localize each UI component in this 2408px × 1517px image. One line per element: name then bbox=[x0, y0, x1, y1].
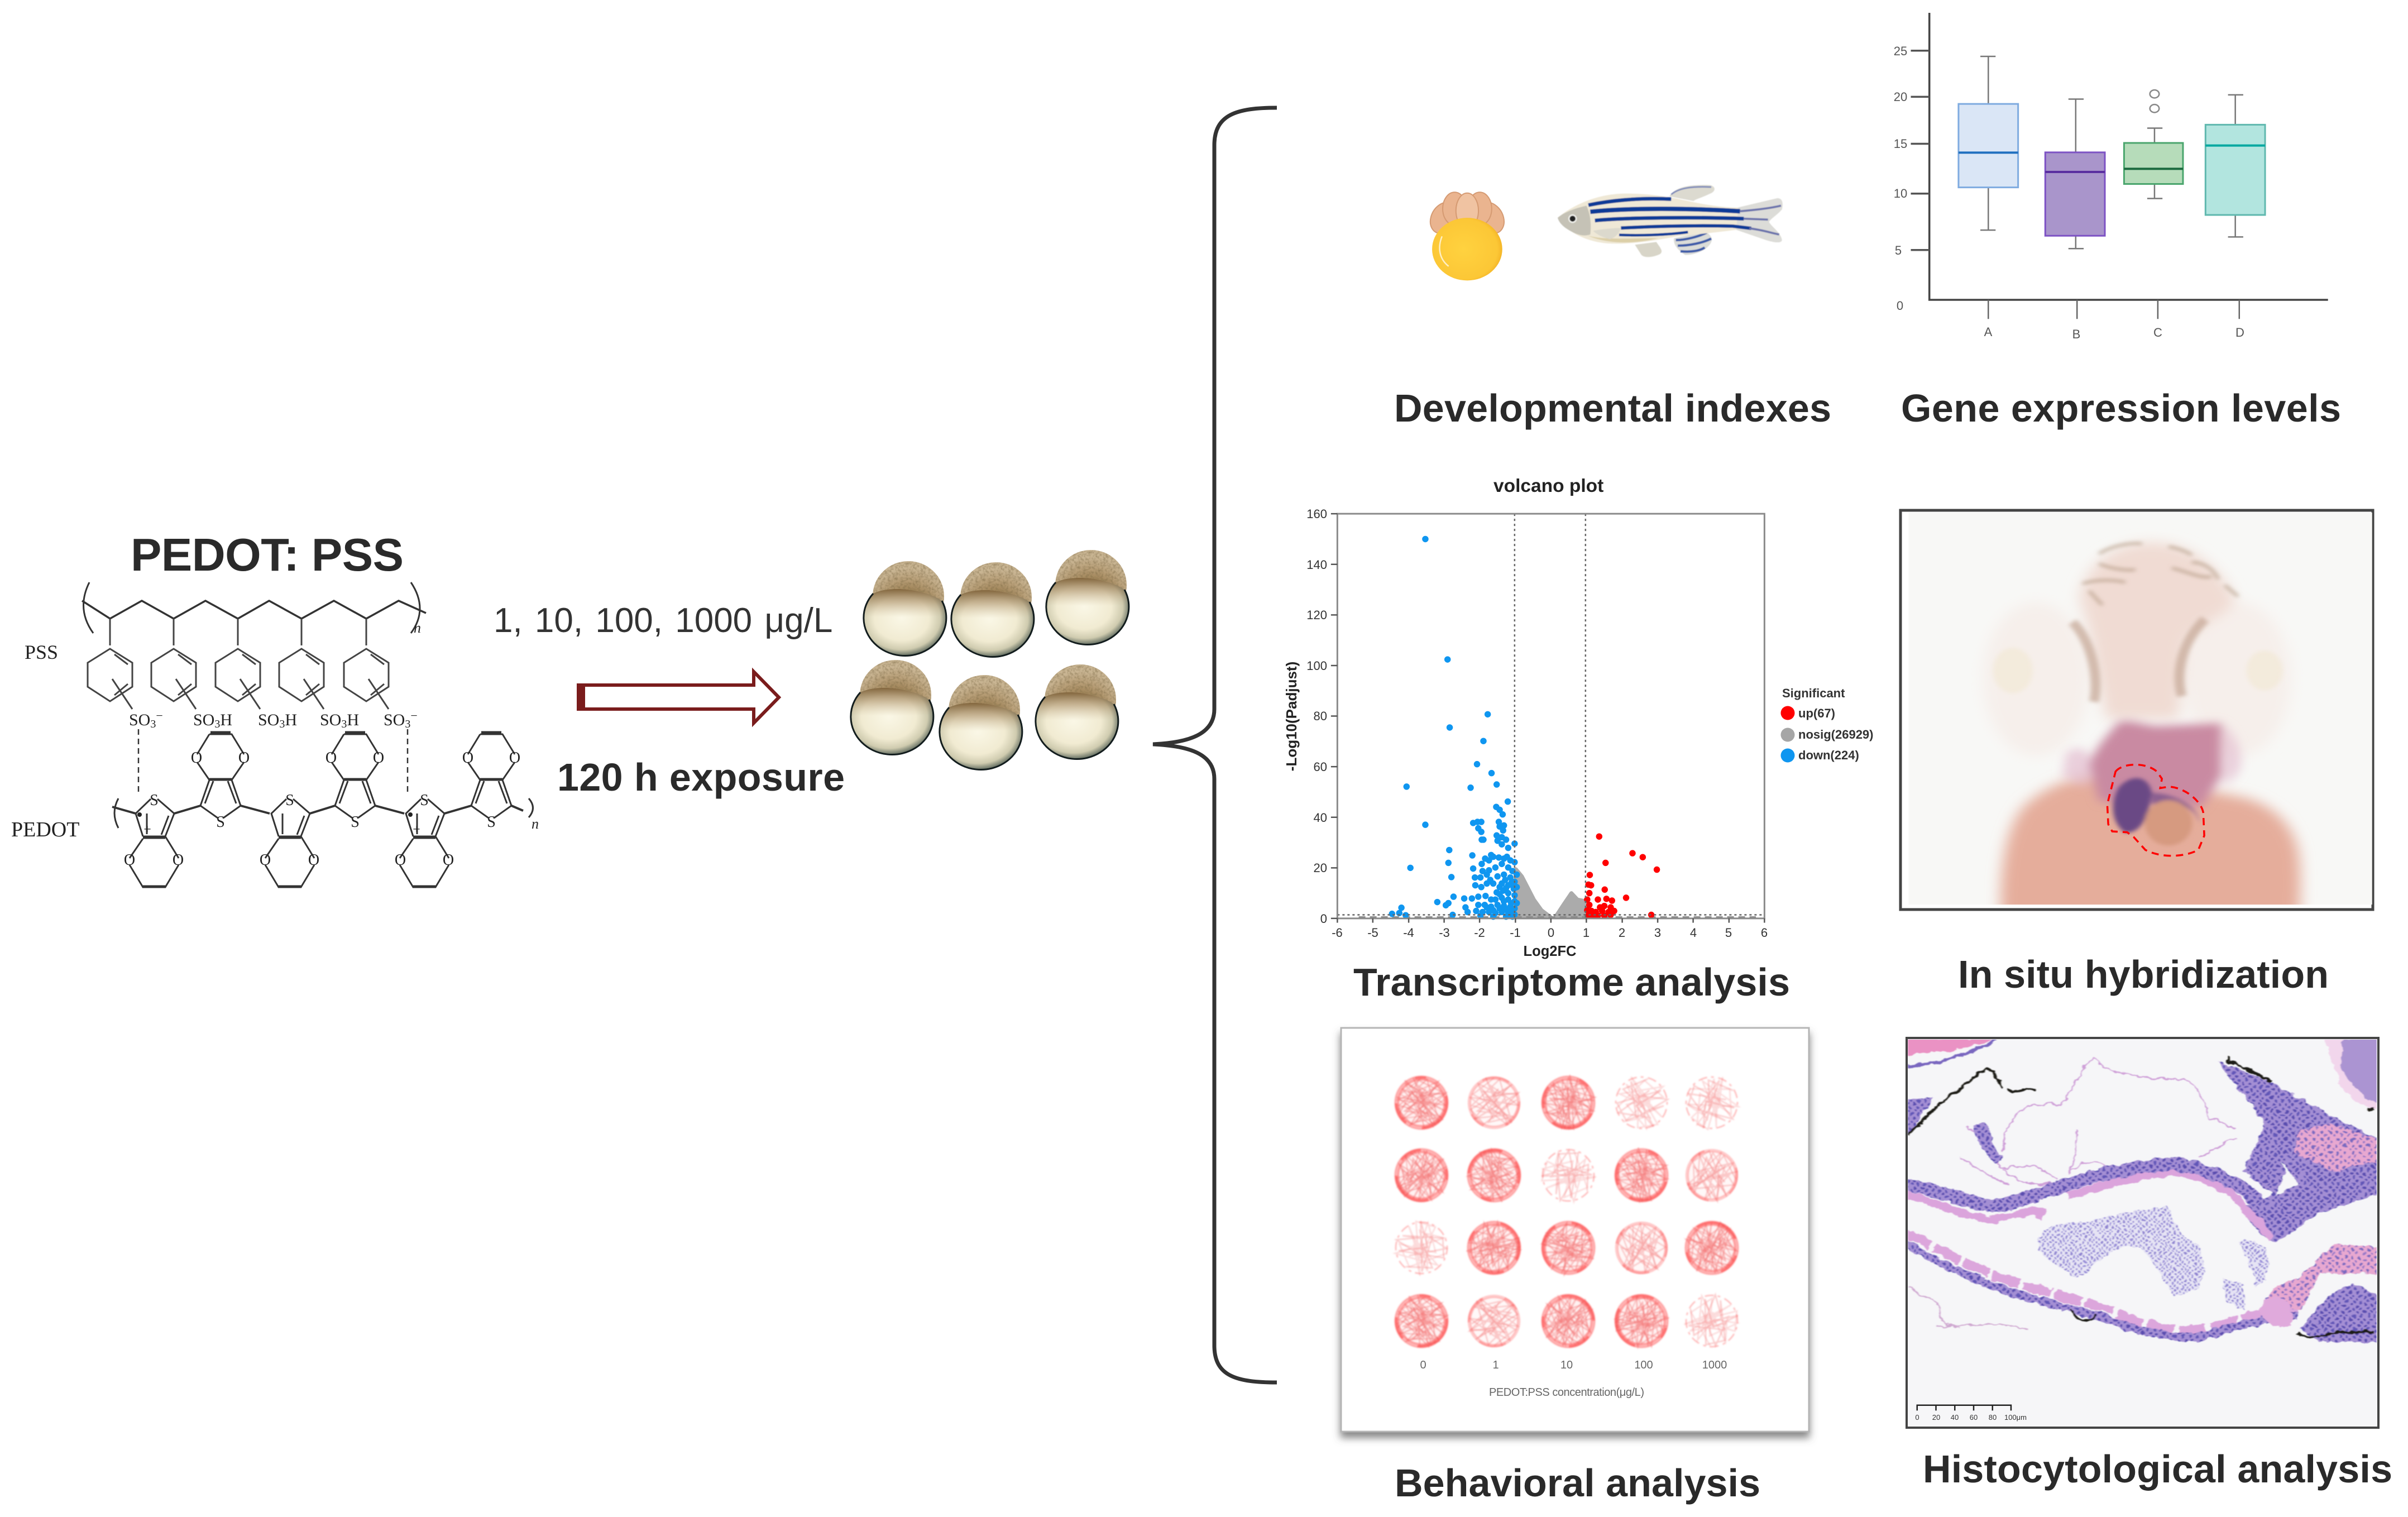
box C bbox=[2124, 90, 2183, 198]
non-significant points bbox=[1516, 869, 1586, 917]
chemical structure: PEDOT chain: O bbox=[395, 851, 406, 869]
x axis tick labels: 1 bbox=[1583, 926, 1590, 940]
sulfonate labels: H bbox=[347, 711, 359, 729]
axis labels: 25 bbox=[1894, 44, 1907, 58]
axis labels: 10 bbox=[1894, 186, 1907, 200]
scale bar labels: 20 bbox=[1932, 1413, 1940, 1422]
down-regulated points bbox=[1392, 539, 1517, 917]
heading: Gene expression levels: Gene expression levels bbox=[1901, 386, 2341, 430]
text: concentrations: 1, 10, 100, 1000 μg/L bbox=[494, 601, 832, 640]
box plot: gene expression bbox=[1894, 13, 2328, 341]
axis caption: PEDOT:PSS concentration(μg/L) bbox=[1489, 1386, 1644, 1399]
y axis tick labels: 20 bbox=[1314, 861, 1327, 875]
sulfonate labels: − bbox=[410, 709, 418, 722]
x axis tick labels: 5 bbox=[1725, 926, 1732, 940]
dashed heart outline bbox=[2107, 765, 2204, 856]
concentration labels: 100 bbox=[1634, 1359, 1653, 1371]
title: PEDOT: PSS: PEDOT: PSS bbox=[131, 529, 404, 581]
curly bracket bbox=[1153, 108, 1277, 1382]
icon: zebrafish bbox=[1558, 185, 1783, 257]
text: exposure duration: 120 h exposure bbox=[557, 755, 845, 799]
chemical structure: PEDOT chain: n bbox=[532, 816, 539, 832]
sulfonate labels: SO bbox=[320, 711, 341, 729]
y axis tick labels: 120 bbox=[1306, 608, 1327, 622]
heading: Developmental indexes: Developmental indexes bbox=[1394, 386, 1831, 430]
box D bbox=[2205, 95, 2265, 237]
y axis tick labels: 140 bbox=[1306, 558, 1327, 572]
upper epithelium band bbox=[1905, 1172, 2272, 1238]
x axis tick labels: -1 bbox=[1510, 926, 1521, 940]
chemical structure: PEDOT chain: O bbox=[443, 851, 454, 869]
axis labels: 15 bbox=[1894, 137, 1907, 151]
x axis tick labels: -2 bbox=[1474, 926, 1485, 940]
sulfonate labels: 3 bbox=[341, 718, 347, 730]
chemical structure: PEDOT chain: O bbox=[325, 749, 337, 767]
swim track wells bbox=[1385, 1068, 1747, 1356]
axis labels: 5 bbox=[1895, 243, 1902, 257]
up-regulated points bbox=[1587, 836, 1657, 916]
chemical structure: PEDOT chain: O bbox=[173, 851, 184, 869]
box B bbox=[2045, 99, 2105, 248]
panel: behavioral analysis tracks bbox=[1341, 1028, 1809, 1432]
heading: Transcriptome analysis: Transcriptome analysis bbox=[1353, 960, 1790, 1004]
chemical structure: PEDOT chain: O bbox=[238, 749, 250, 767]
x axis tick labels: -4 bbox=[1403, 926, 1414, 940]
scale bar labels: 60 bbox=[1970, 1413, 1978, 1422]
chemical structure: PEDOT chain: S bbox=[420, 792, 429, 809]
concentration labels: 1 bbox=[1492, 1359, 1499, 1371]
membrane strands bbox=[1960, 1058, 2236, 1185]
lower epithelium band bbox=[1905, 1234, 2298, 1331]
sulfonate labels: SO bbox=[193, 711, 214, 729]
axis labels: B bbox=[2072, 327, 2080, 341]
chemical structure: PEDOT chain: S bbox=[285, 792, 294, 809]
sulfonate labels: H bbox=[220, 711, 232, 729]
chemical structure: PEDOT chain: O bbox=[260, 851, 271, 869]
sulfonate labels: SO bbox=[384, 711, 405, 729]
x axis tick labels: 0 bbox=[1548, 926, 1554, 940]
chemical structure: PEDOT chain: O bbox=[509, 749, 520, 767]
right tissue mass bbox=[2218, 1061, 2379, 1242]
chemical structure: PEDOT chain: O bbox=[308, 851, 319, 869]
chemical structure: PEDOT chain: + bbox=[143, 822, 151, 837]
y axis tick labels: 80 bbox=[1314, 709, 1327, 723]
luminal bacteria mass bbox=[2038, 1207, 2205, 1297]
heading: In situ hybridization: In situ hybridization bbox=[1958, 953, 2329, 996]
y axis tick labels: 0 bbox=[1320, 912, 1327, 926]
concentration labels: 10 bbox=[1560, 1359, 1573, 1371]
y axis tick labels: 100 bbox=[1306, 659, 1327, 673]
y axis title: -Log10(Padjust) bbox=[1283, 662, 1300, 771]
plot frame bbox=[1337, 514, 1764, 918]
legend: nosig(26929) bbox=[1798, 728, 1874, 741]
heading: Histocytological analysis: Histocytological analysis bbox=[1923, 1447, 2392, 1491]
panel: in situ hybridization micrograph bbox=[1900, 510, 2373, 924]
x axis tick labels: -5 bbox=[1367, 926, 1378, 940]
lower right tissue bbox=[2266, 1244, 2379, 1310]
axis labels: 20 bbox=[1894, 90, 1907, 104]
axis labels: D bbox=[2235, 326, 2244, 339]
dark pigment folds bbox=[1908, 1057, 2375, 1337]
y axis tick labels: 160 bbox=[1306, 507, 1327, 521]
sulfonate labels: SO bbox=[129, 711, 150, 729]
axis labels: C bbox=[2153, 326, 2162, 339]
sulfonate labels: SO bbox=[258, 711, 279, 729]
arrow: exposure bbox=[577, 672, 779, 723]
volcano plot bbox=[1283, 476, 1874, 959]
sulfonate labels: 3 bbox=[214, 718, 220, 730]
legend: down(224) bbox=[1798, 748, 1859, 762]
embryo body bbox=[1983, 542, 2300, 924]
axis labels bbox=[1894, 44, 2244, 341]
scale bar bbox=[1917, 1405, 2011, 1410]
x axis tick labels: 3 bbox=[1654, 926, 1661, 940]
axis labels: A bbox=[1984, 325, 1993, 339]
panel: histology section bbox=[1905, 1038, 2379, 1428]
icon: embryo bbox=[1427, 192, 1507, 280]
y axis tick labels: 60 bbox=[1314, 760, 1327, 774]
PSS benzene rings and sulfonate side chains bbox=[88, 619, 389, 709]
plot title: volcano plot bbox=[1493, 476, 1603, 496]
scale bar labels bbox=[1915, 1413, 2027, 1422]
concentration labels bbox=[1420, 1359, 1727, 1371]
chemical structure: PEDOT chain: O bbox=[373, 749, 384, 767]
chemical structure: PEDOT chain: S bbox=[150, 792, 159, 809]
sulfonate labels: 3 bbox=[150, 718, 156, 730]
corner tissue bbox=[1908, 1040, 1992, 1056]
chemical structure: PEDOT chain: S bbox=[487, 813, 496, 831]
PSS label: PSS bbox=[25, 641, 58, 663]
sulfonate labels bbox=[129, 709, 418, 730]
y axis tick labels bbox=[1306, 507, 1327, 926]
scale bar labels: 40 bbox=[1951, 1413, 1959, 1422]
legend: Significant bbox=[1782, 686, 1845, 700]
sulfonate labels: H bbox=[285, 711, 297, 729]
heading: Behavioral analysis: Behavioral analysis bbox=[1395, 1461, 1760, 1505]
x axis tick labels bbox=[1332, 926, 1768, 940]
chemical structure: PEDOT chain: O bbox=[462, 749, 473, 767]
legend: up(67) bbox=[1798, 706, 1835, 720]
scale bar labels: 100μm bbox=[2004, 1413, 2027, 1422]
x axis title: Log2FC bbox=[1524, 944, 1576, 959]
zebrafish embryos group bbox=[851, 550, 1129, 770]
chemical structure: PEDOT chain: S bbox=[216, 813, 225, 831]
box A bbox=[1959, 56, 2018, 230]
scale bar labels: 0 bbox=[1915, 1413, 1919, 1422]
x axis tick labels: -6 bbox=[1332, 926, 1343, 940]
y axis tick labels: 40 bbox=[1314, 811, 1327, 825]
chemical structure: PEDOT chain: + bbox=[413, 822, 420, 837]
x axis tick labels: 2 bbox=[1619, 926, 1625, 940]
PEDOT label: PEDOT bbox=[11, 818, 79, 841]
chemical structure: PEDOT chain: S bbox=[351, 813, 360, 831]
axis labels: 0 bbox=[1897, 299, 1903, 313]
sulfonate labels: − bbox=[156, 709, 163, 722]
chemical structure: PSS chain: n bbox=[414, 620, 421, 636]
legend bbox=[1781, 686, 1874, 763]
chemical structure: PEDOT chain bbox=[11, 733, 539, 887]
sulfonate labels: 3 bbox=[279, 718, 285, 730]
concentration labels: 1000 bbox=[1702, 1359, 1727, 1371]
concentration labels: 0 bbox=[1420, 1359, 1426, 1371]
x axis tick labels: -3 bbox=[1439, 926, 1450, 940]
scale bar labels: 80 bbox=[1989, 1413, 1997, 1422]
x axis tick labels: 6 bbox=[1761, 926, 1768, 940]
chemical structure: PEDOT chain: O bbox=[191, 749, 202, 767]
chemical structure: PSS chain bbox=[25, 582, 426, 793]
x axis tick labels: 4 bbox=[1690, 926, 1697, 940]
sulfonate labels: 3 bbox=[405, 718, 410, 730]
chemical structure: PEDOT chain: O bbox=[124, 851, 135, 869]
